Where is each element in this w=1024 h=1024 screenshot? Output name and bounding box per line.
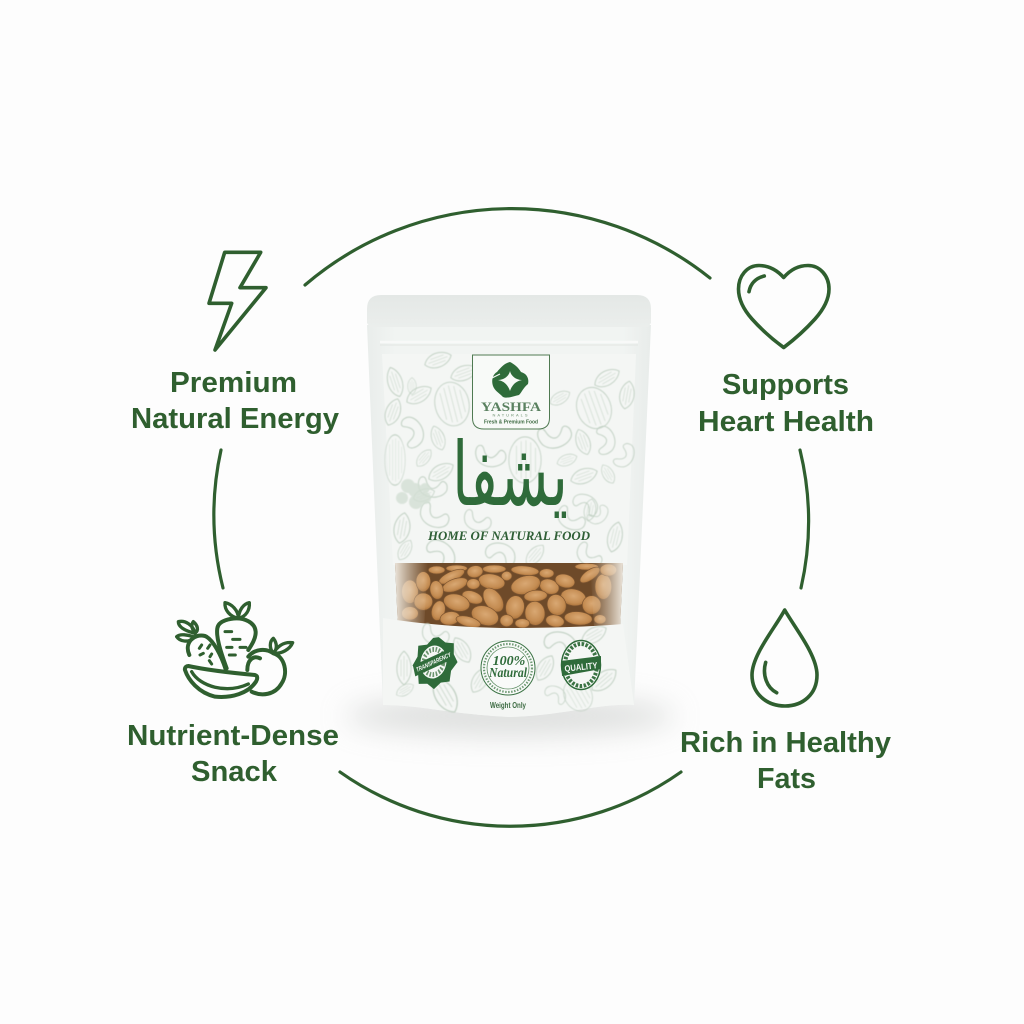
brand tagline: NATURALS [492, 412, 530, 418]
walnut texture [396, 479, 431, 509]
brand subline: Fresh & Premium Food [484, 420, 538, 426]
slogan: HOME OF NATURAL FOOD [427, 528, 591, 543]
label: premium natural energy [131, 367, 339, 435]
zip line [380, 341, 638, 343]
label: supports heart health: Heart Health [698, 406, 874, 438]
brand name: YASHFA [481, 400, 541, 414]
icon: vegetables in a bowl [177, 603, 293, 697]
pouch shadow [345, 696, 675, 736]
bottom band [383, 618, 634, 717]
label: nutrient-dense snack [127, 720, 339, 788]
pouch body [367, 325, 651, 717]
label: nutrient-dense snack: Snack [191, 756, 278, 788]
logo box [472, 355, 550, 429]
icon: lightning bolt [209, 252, 266, 350]
icon: oil drop [752, 610, 817, 706]
badge: 100% natural: 100% [493, 654, 525, 669]
label: premium natural energy: Natural Energy [131, 403, 339, 435]
label: rich in healthy fats [680, 727, 891, 795]
label: nutrient-dense snack: Nutrient-Dense [127, 720, 339, 752]
badge: quality [561, 640, 601, 690]
badge: quality: QUALITY [564, 660, 598, 674]
product pouch [367, 295, 651, 717]
badge: 100% natural: Natural [488, 666, 527, 681]
label: supports heart health [698, 369, 874, 438]
weight label: Weight Only [490, 701, 526, 710]
icon: heart [738, 266, 829, 348]
window with nuts [395, 563, 623, 630]
arabic brand name: يشفا [452, 423, 568, 526]
label: rich in healthy fats: Rich in Healthy [680, 727, 891, 759]
pouch top seal [367, 295, 651, 327]
badge: transparency: TRANSPARENCY [416, 651, 452, 674]
window pale left edge [395, 563, 428, 628]
label: premium natural energy: Premium [170, 367, 297, 399]
band nut pattern [394, 622, 621, 717]
logo mark [492, 362, 528, 398]
nut pattern [382, 349, 636, 574]
badge: 100% natural [481, 641, 535, 695]
circular ring arcs [214, 209, 809, 826]
label: supports heart health: Supports [722, 369, 849, 401]
badge: transparency [409, 633, 462, 693]
window pale right edge [590, 563, 623, 628]
label: rich in healthy fats: Fats [757, 763, 816, 795]
printed panel [382, 354, 636, 565]
